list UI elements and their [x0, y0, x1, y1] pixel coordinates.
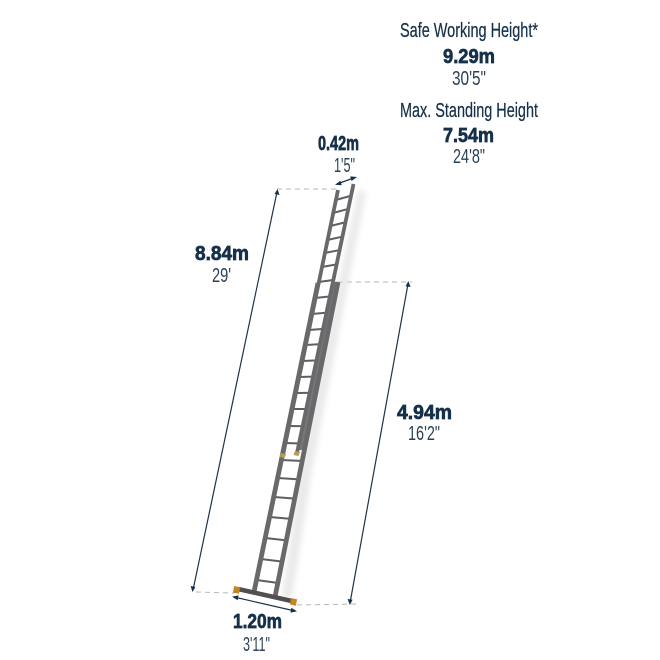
text block: safe working height: 30'5"	[452, 68, 486, 90]
label: stabiliser width: 3'11"	[243, 634, 270, 656]
label: stabiliser width	[233, 610, 282, 656]
label: extended length: 8.84m	[195, 242, 249, 265]
stabiliser bar	[238, 589, 294, 602]
upper section feet	[280, 451, 300, 458]
text block: safe working height: Safe Working Height*	[400, 20, 538, 42]
label: extended length	[195, 242, 249, 287]
lower section rails	[254, 282, 338, 597]
text block: safe working height	[400, 20, 538, 90]
dimension: extended length arrow	[191, 189, 336, 593]
label: extended length: 29'	[212, 265, 231, 287]
overlap fill between right rails	[298, 282, 338, 450]
label: ladder width: 0.42m	[318, 132, 359, 155]
ladder	[233, 184, 366, 606]
label: ladder width: 1'5"	[334, 155, 355, 177]
dimension: closed length arrow	[297, 281, 412, 605]
text block: safe working height: 9.29m	[443, 45, 495, 68]
text block: max standing height: Max. Standing Height	[400, 100, 538, 122]
label: stabiliser width: 1.20m	[233, 610, 282, 633]
dimension: base width arrow	[232, 595, 297, 613]
dimension: top width arrow	[335, 176, 357, 185]
label: closed length: 4.94m	[397, 401, 452, 424]
text block: max standing height: 24'8"	[453, 146, 485, 168]
label: closed length: 16'2"	[408, 423, 440, 445]
label: closed length	[397, 401, 452, 445]
upper section rails	[283, 184, 354, 455]
ladder shadow	[282, 190, 366, 598]
stabiliser end caps	[233, 586, 297, 606]
rungs	[256, 196, 350, 583]
text block: max standing height	[400, 100, 538, 168]
text block: max standing height: 7.54m	[443, 124, 494, 147]
label: ladder width	[318, 132, 359, 177]
